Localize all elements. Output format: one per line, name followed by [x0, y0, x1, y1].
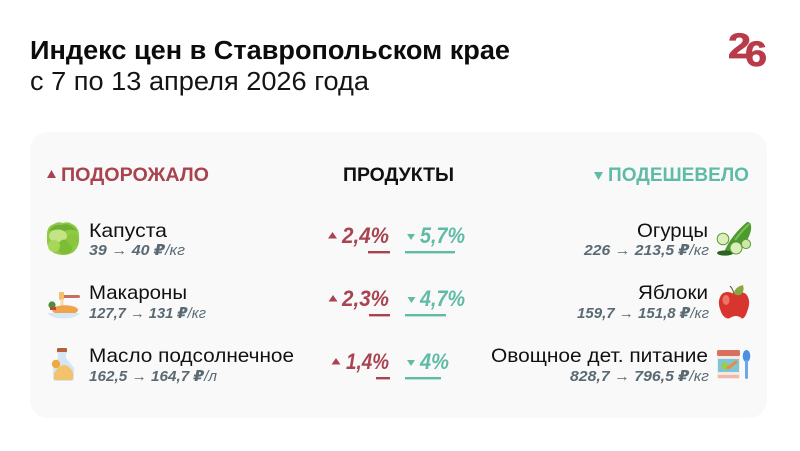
- item: cucumbers: 226 → 213,5 ₽ /кг: [583, 242, 710, 259]
- icon: cucumbers: [717, 222, 751, 256]
- item: sunflower oil: Масло подсолнечное: [89, 345, 294, 367]
- change: sunflower oil: [332, 349, 449, 379]
- panel: price table: [30, 132, 767, 418]
- item: cucumbers: Огурцы: [637, 220, 708, 242]
- icon: pasta plate: [47, 292, 80, 318]
- item: baby food: 828,7 → 796,5 ₽ /кг: [570, 368, 710, 385]
- item: apples: 159,7 → 151,8 ₽/кг: [577, 305, 710, 322]
- change: sunflower oil: 1,4%: [346, 349, 389, 374]
- change: cabbage: 5,7%: [420, 223, 465, 248]
- item: pasta: Макароны: [89, 282, 187, 304]
- item: sunflower oil: 162,5 → 164,7 ₽/л: [89, 368, 218, 385]
- title: Индекс цен в Ставропольском крае: [30, 37, 510, 65]
- title: с 7 по 13 апреля 2026 года: [30, 68, 370, 96]
- logo: 26: [728, 27, 767, 74]
- change: cabbage: 2,4%: [341, 223, 389, 248]
- heading: products: ПРОДУКТЫ: [343, 164, 454, 186]
- item: apples: [577, 282, 710, 322]
- icon: baby food jar with spoon: [717, 350, 750, 379]
- item: pasta: 127,7 → 131 ₽/кг: [89, 305, 207, 322]
- item: baby food: Овощное дет. питание: [491, 345, 708, 367]
- item: apples: Яблоки: [638, 282, 708, 304]
- icon: oil bottle: [52, 348, 74, 381]
- icon: cabbage: [47, 222, 79, 255]
- change: pasta: [328, 286, 465, 316]
- item: cabbage: Капуста: [89, 220, 167, 242]
- heading: went down: ПОДЕШЕВЕЛО: [608, 164, 749, 186]
- item: sunflower oil: [89, 345, 294, 385]
- change: sunflower oil: 4%: [419, 349, 449, 374]
- heading: went up: ПОДОРОЖАЛО: [61, 164, 209, 186]
- change: pasta: 4,7%: [419, 286, 465, 311]
- icon: apple: [719, 285, 749, 319]
- item: cucumbers: [583, 220, 710, 259]
- item: cabbage: [89, 220, 186, 259]
- change: cabbage: [328, 223, 465, 253]
- item: baby food: [491, 345, 710, 385]
- change: pasta: 2,3%: [341, 286, 389, 311]
- logo: 26: 2: [728, 27, 751, 66]
- logo: 26: 6: [745, 35, 767, 74]
- item: pasta: [89, 282, 207, 322]
- item: cabbage: 39 → 40 ₽ /кг: [89, 242, 186, 259]
- title: [30, 37, 510, 96]
